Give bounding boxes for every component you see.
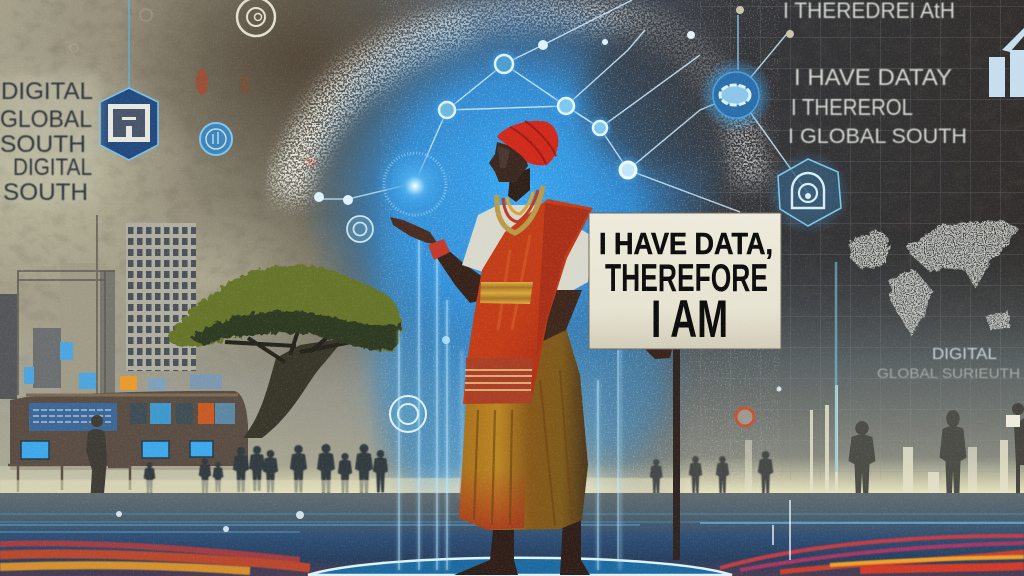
heading: right panel text: I GLOBAL SOUTH xyxy=(788,125,967,148)
standing man left xyxy=(86,415,107,505)
vertical light beams xyxy=(399,240,836,570)
glowing dot xyxy=(123,526,143,546)
right figures xyxy=(848,403,1024,505)
red head wrap xyxy=(497,121,558,165)
left horizon fog xyxy=(0,480,370,493)
blue glow behind figure xyxy=(300,0,780,500)
heading: right panel text xyxy=(783,0,967,148)
node: red ring xyxy=(736,408,754,426)
white shirt xyxy=(462,205,592,292)
node: large orb xyxy=(375,143,455,223)
corner bar icon xyxy=(989,28,1024,97)
reflective floor xyxy=(0,493,1024,576)
node: hexagon document icon xyxy=(100,88,158,160)
tram kiosk with screens xyxy=(0,391,250,494)
wall paint marks xyxy=(70,9,317,167)
pale backing xyxy=(0,76,99,204)
small dots xyxy=(314,6,794,205)
heading: right panel text: I HAVE DATAY xyxy=(794,64,952,90)
label text: SOUTH xyxy=(3,179,88,206)
node: centre ring xyxy=(551,91,581,121)
sharp beams xyxy=(399,240,618,570)
distant silhouettes xyxy=(650,451,773,495)
face xyxy=(489,142,528,182)
desk monitors xyxy=(8,441,213,492)
network nodes xyxy=(100,0,850,546)
node: brain icon xyxy=(699,58,773,132)
floor light disc xyxy=(308,558,732,575)
red sash xyxy=(463,199,593,404)
node: waist-level ring xyxy=(390,396,426,432)
gold belt xyxy=(480,282,533,304)
protest sign: THEREFORE xyxy=(605,257,768,300)
floating screens xyxy=(24,342,222,390)
heading: left stacked labels xyxy=(0,76,99,206)
woman figure xyxy=(390,121,672,575)
node: upper ring xyxy=(488,48,520,80)
protest sign: I AM xyxy=(651,290,728,349)
world map xyxy=(850,220,1018,337)
label text xyxy=(0,78,93,206)
holding hand xyxy=(645,349,672,359)
node: sign ring xyxy=(613,155,643,185)
floating sparkle dots xyxy=(116,336,782,532)
torso shade xyxy=(533,290,582,345)
label text: GLOBAL xyxy=(0,106,92,133)
network lines xyxy=(129,0,808,212)
panel beam xyxy=(835,262,837,472)
node: small lower ring xyxy=(347,216,373,242)
soft beams xyxy=(399,240,620,570)
raised arm and hand xyxy=(390,217,484,303)
data grid panel xyxy=(700,0,1024,480)
neck xyxy=(508,168,530,202)
tower with windows xyxy=(126,223,196,371)
labels under map: GLOBAL SURIEUTH xyxy=(877,365,1020,381)
rear towers xyxy=(0,215,115,399)
city skyline xyxy=(0,215,222,399)
tree xyxy=(168,265,402,438)
labels under map: DIGITAL xyxy=(932,346,997,363)
heading: right panel text: I THEREROL xyxy=(791,94,913,120)
protest sign: I HAVE DATA, xyxy=(599,226,773,261)
labels under map xyxy=(877,346,1020,381)
node: spiral hexagon icon xyxy=(766,151,850,235)
floor colour streaks xyxy=(0,536,1024,572)
label text: DIGITAL xyxy=(13,154,92,181)
protest sign xyxy=(589,213,781,349)
node: blue circle badge xyxy=(200,123,232,155)
legs and feet xyxy=(454,520,590,575)
floor sparks xyxy=(773,500,790,560)
sash woven border xyxy=(465,358,532,403)
right data bars xyxy=(745,385,1008,493)
node: lower ring xyxy=(587,115,613,141)
sign pole xyxy=(673,349,680,560)
node: top spiral ring xyxy=(237,0,275,36)
horizon fog xyxy=(370,478,690,493)
label text: SOUTH xyxy=(0,131,86,158)
crowd under tree xyxy=(144,444,388,494)
label text: DIGITAL xyxy=(1,78,93,105)
mustard skirt xyxy=(459,325,588,530)
necklace xyxy=(497,186,543,233)
speckled dome globe xyxy=(285,15,752,205)
beaded bracelet xyxy=(428,239,450,260)
node: left ring xyxy=(432,95,462,125)
